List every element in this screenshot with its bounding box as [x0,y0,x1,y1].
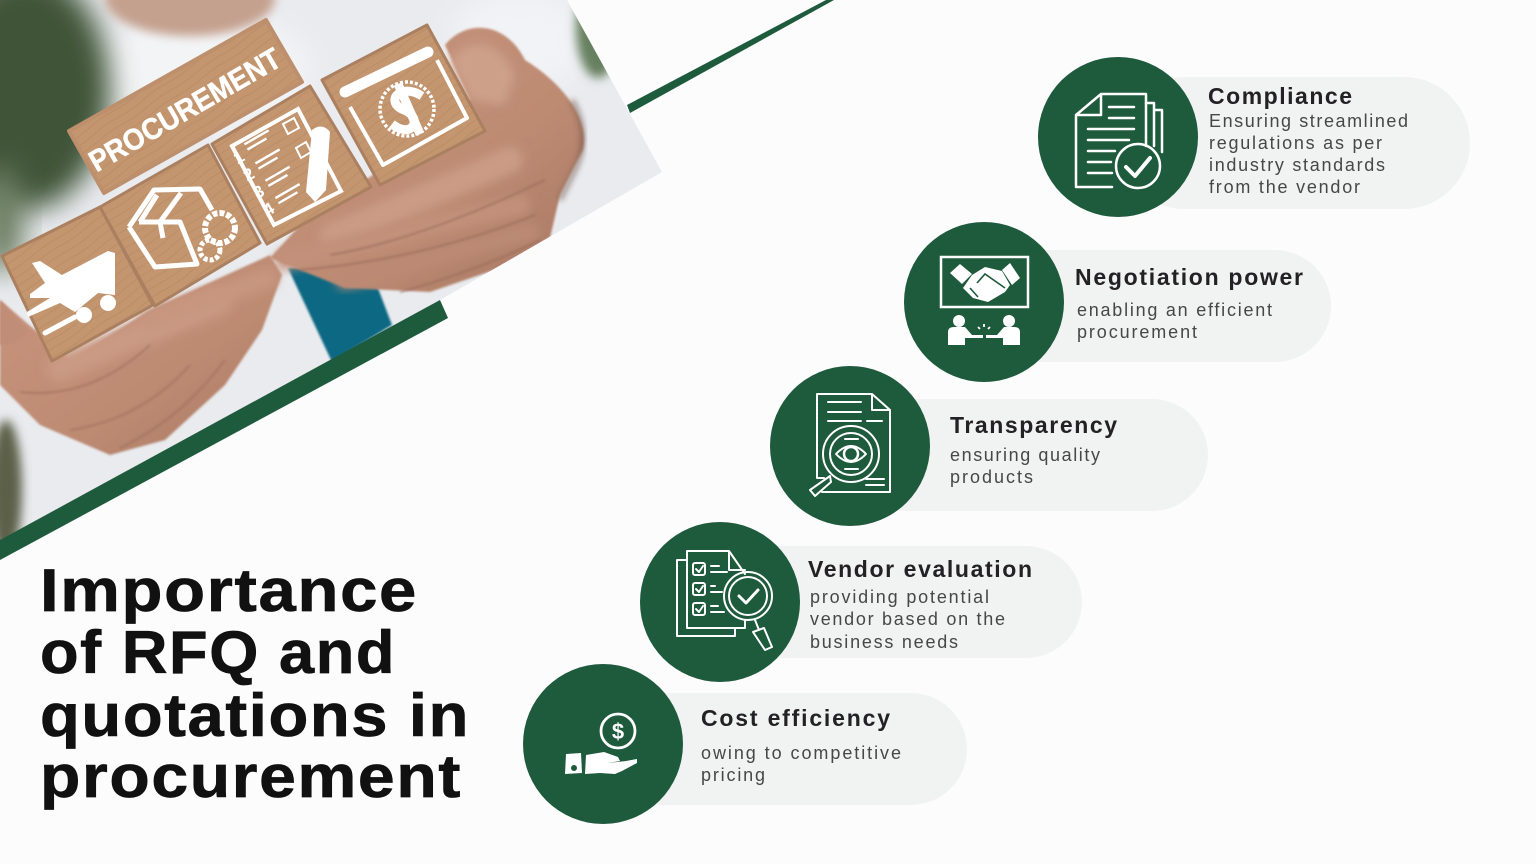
text: compliance description: regulations as per [1209,133,1382,153]
block: dollar browser window [322,25,485,185]
text: vendor description [810,587,1005,652]
text: cost description [701,743,901,785]
accent band: upper diagonal [627,0,834,113]
heading: negotiation power: Negotiation power [1075,264,1303,290]
right hand [270,28,584,292]
text: negotiation description: enabling an efficient [1077,300,1272,320]
block: numbered checklist [212,86,371,244]
block: box with gear [100,145,260,306]
text: vendor description: business needs [810,632,958,652]
icon: handshake on screen with two people [941,257,1028,345]
heading: cost efficiency: Cost efficiency [701,705,890,731]
block: PROCUREMENT label: PROCUREMENT [83,42,287,179]
block: numbered checklist: 1 [230,147,248,168]
panel: vendor evaluation [640,522,1082,682]
accent band: lower diagonal [0,300,448,560]
text: transparency description: ensuring quality [950,445,1100,465]
text: transparency description: products [950,467,1033,487]
text: compliance description: industry standards [1209,155,1385,175]
title: procurement [40,743,462,810]
text: compliance description: from the vendor [1209,177,1360,197]
icon: document with eye magnifier [810,394,890,496]
text: vendor description: vendor based on the [810,609,1005,629]
panel: compliance [1038,57,1470,217]
block: numbered checklist: 3 [250,181,268,203]
panel: cost efficiency [523,664,967,824]
text: cost description: owing to competitive [701,743,901,763]
photo: hands holding procurement wooden blocks [0,0,680,560]
left hand [0,255,282,455]
text: transparency description [950,445,1100,487]
title: quotations in [40,682,470,749]
title: of RFQ and [40,619,396,686]
icon: compliance documents [1076,94,1162,188]
block: shopping cart [2,207,153,361]
icon: hand with dollar coin [565,714,637,774]
title: Importance [40,557,418,624]
heading: vendor evaluation: Vendor evaluation [808,556,1032,582]
block: numbered checklist: 2 [240,164,258,185]
text: compliance description [1209,111,1408,197]
panel: transparency [770,366,1208,526]
icon: checklist with magnifier [677,551,772,650]
text: cost description: pricing [701,765,765,785]
heading: transparency: Transparency [950,412,1117,438]
heading: compliance: Compliance [1208,83,1352,109]
title [40,557,470,810]
text: vendor description: providing potential [810,587,989,607]
icon: hand with dollar coin: $ [612,719,624,744]
tie [288,262,392,362]
text: negotiation description: procurement [1077,322,1197,342]
text: compliance description: Ensuring streamlined [1209,111,1408,131]
panel: negotiation power [904,222,1331,382]
text: negotiation description [1077,300,1272,342]
block: numbered checklist: 4 [260,198,278,220]
